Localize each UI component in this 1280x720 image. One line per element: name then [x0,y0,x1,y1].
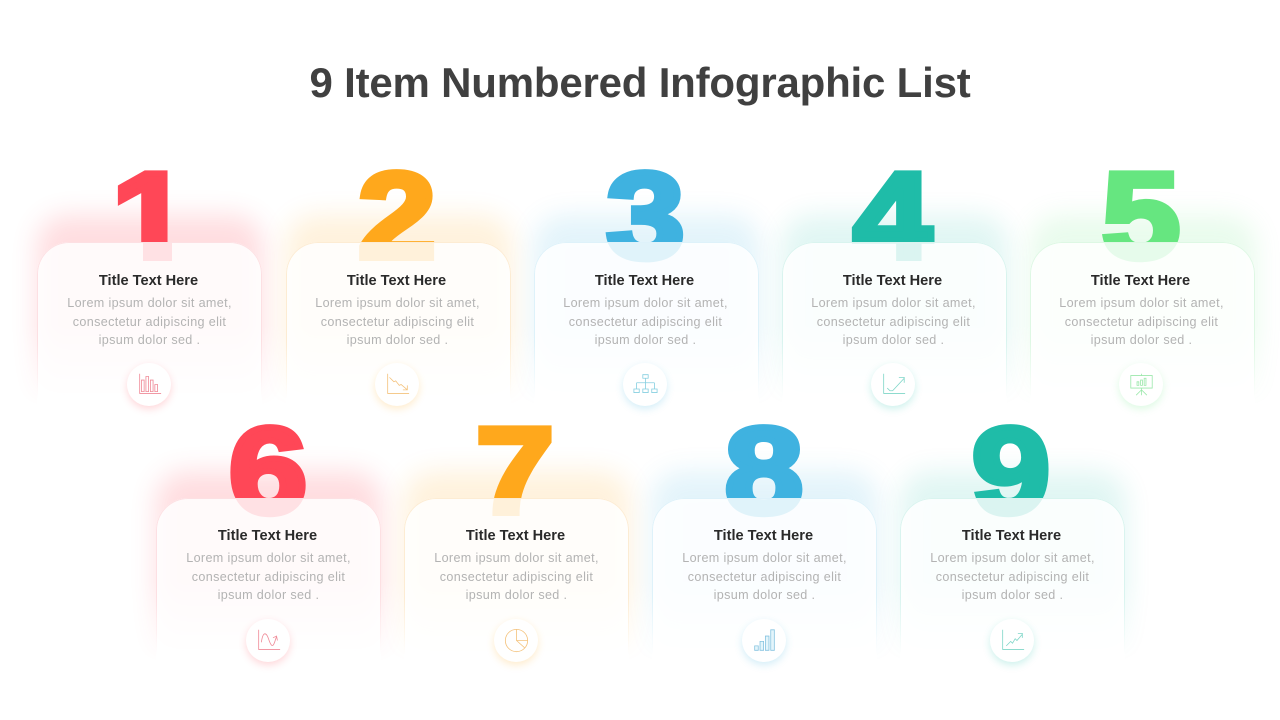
card title: Title Text Here [595,272,694,288]
panel: item 4 [775,148,1016,412]
number 2: 2 [358,148,436,285]
card text: ipsum dolor sed . [347,333,448,347]
panel: item 7 [396,403,638,668]
card title: Title Text Here [99,272,198,288]
card text: Lorem ipsum dolor sit amet, [811,296,976,310]
card text: ipsum dolor sed . [962,588,1063,602]
icon: falling chart [375,363,419,406]
card glow [278,206,520,370]
card [37,242,262,407]
panel: item 2 [278,148,520,412]
card text [434,551,599,602]
card glow [527,208,767,361]
card title: Title Text Here [218,528,317,544]
card [404,498,629,663]
card title: Title Text Here [347,272,446,288]
card text [811,296,976,347]
card [156,498,381,663]
number 3: 3 [606,148,685,285]
card text: consectetur adipiscing elit [440,570,593,584]
card text: Lorem ipsum dolor sit amet, [563,296,728,310]
icon: ascending bars [742,619,786,662]
card glow [396,462,638,626]
card [1030,242,1255,407]
card [652,498,877,663]
icon: org chart [623,363,667,406]
card text: ipsum dolor sed . [99,333,200,347]
card text [930,551,1095,602]
card text: consectetur adipiscing elit [817,314,970,328]
number 5: 5 [1102,148,1180,285]
number 9: 9 [972,403,1050,540]
panel: item 6 [148,403,390,668]
card glow [775,208,1016,362]
card text: ipsum dolor sed . [218,588,319,602]
panel: item 9 [893,403,1134,668]
panel: item 5 [1026,148,1260,412]
card text [1059,296,1224,347]
icon: presentation board [1119,363,1163,406]
icon: bar chart [127,363,171,406]
card text: ipsum dolor sed . [714,588,815,602]
panel: item 1 [28,170,272,412]
icon: trend line chart [990,619,1034,662]
card text: ipsum dolor sed . [466,588,567,602]
card glow [28,206,272,367]
number 1: 1 [112,148,190,285]
card [782,242,1007,407]
card glow [645,464,885,617]
card text: consectetur adipiscing elit [73,314,226,328]
number 8: 8 [725,403,803,540]
card text: consectetur adipiscing elit [192,570,345,584]
card [286,242,511,407]
card text: consectetur adipiscing elit [1065,314,1218,328]
card title: Title Text Here [1091,272,1190,288]
number 6: 6 [229,403,307,540]
card glow [893,464,1134,618]
card text: consectetur adipiscing elit [688,570,841,584]
card text: consectetur adipiscing elit [936,570,1089,584]
card text: Lorem ipsum dolor sit amet, [315,296,480,310]
card text: Lorem ipsum dolor sit amet, [930,551,1095,565]
card title: Title Text Here [466,528,565,544]
card title: Title Text Here [843,272,942,288]
card title: Title Text Here [714,528,813,544]
card text [682,551,847,602]
panel: item 8 [645,403,885,668]
card text [315,296,480,347]
card text: ipsum dolor sed . [1091,333,1192,347]
card glow [148,462,390,623]
card text: Lorem ipsum dolor sit amet, [67,296,232,310]
card [900,498,1125,663]
card text: consectetur adipiscing elit [321,314,474,328]
card text: ipsum dolor sed . [843,333,944,347]
number 4: 4 [853,148,932,285]
card text: Lorem ipsum dolor sit amet, [186,551,351,565]
icon: wave chart [246,619,290,662]
card text [186,551,351,602]
icon: rising chart [871,363,915,406]
card text: Lorem ipsum dolor sit amet, [434,551,599,565]
card glow [1026,211,1260,348]
card text: ipsum dolor sed . [595,333,696,347]
card text: Lorem ipsum dolor sit amet, [682,551,847,565]
number 7: 7 [476,403,554,540]
card text: consectetur adipiscing elit [569,314,722,328]
title: 9 Item Numbered Infographic List [309,59,971,106]
card text [563,296,728,347]
card text [67,296,232,347]
card [534,242,759,407]
icon: pie chart [494,619,538,662]
card title: Title Text Here [962,528,1061,544]
card text: Lorem ipsum dolor sit amet, [1059,296,1224,310]
panel: item 3 [527,148,767,412]
